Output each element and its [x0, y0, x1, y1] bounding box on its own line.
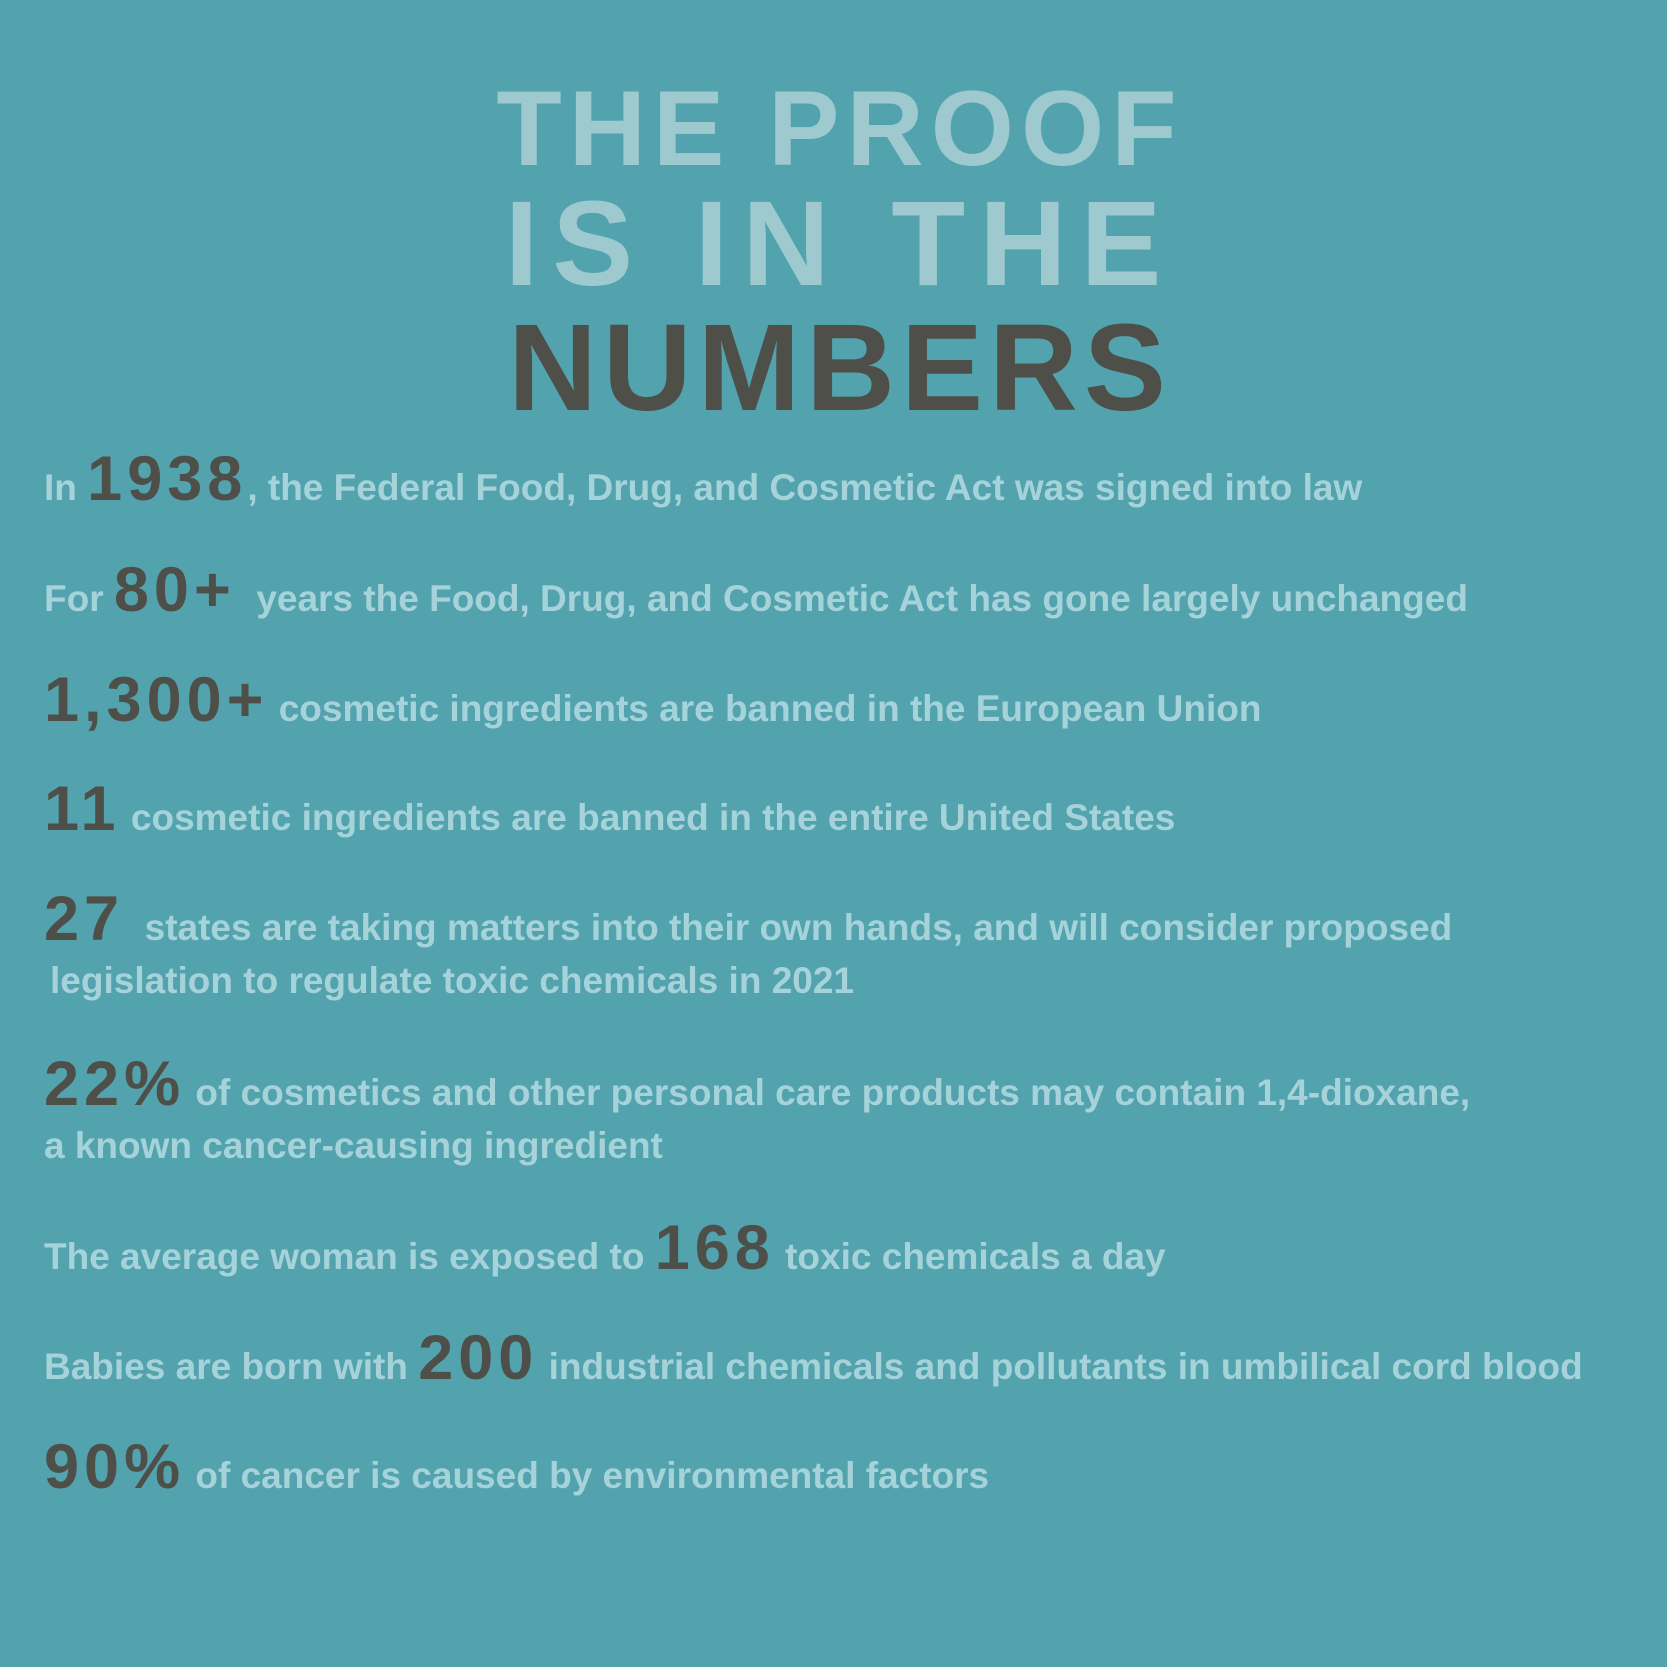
stat: 90%: 90% of cancer is caused by environmental factors [44, 1432, 989, 1502]
stat: 11: 11 cosmetic ingredients are banned in the entire United States [44, 774, 1175, 844]
stat: 80+: For 80+ years the Food, Drug, and Cosmetic Act has gone largely unchanged [44, 555, 1468, 625]
title line 2: IS IN THE [505, 175, 1175, 311]
stat: 22% continuation: a known cancer-causing ingredient [44, 1125, 663, 1166]
title line 1: THE PROOF [496, 68, 1184, 188]
title line 3: NUMBERS [508, 300, 1172, 437]
stat: 1938: In 1938, the Federal Food, Drug, and Cosmetic Act was signed into law [44, 444, 1362, 514]
stat: 168: The average woman is exposed to 168 toxic chemicals a day [44, 1213, 1166, 1283]
stat: 1,300+: 1,300+ cosmetic ingredients are banned in the European Union [44, 665, 1261, 735]
stat: 200: Babies are born with 200 industrial chemicals and pollutants in umbilical cord blood [44, 1323, 1583, 1393]
stat: 27 continuation: legislation to regulate toxic chemicals in 2021 [50, 960, 854, 1001]
title [496, 68, 1184, 437]
stat: 27: 27 states are taking matters into their own hands, and will consider proposed [44, 884, 1452, 954]
stat: 22%: 22% of cosmetics and other personal care products may contain 1,4-dioxane, [44, 1049, 1470, 1119]
